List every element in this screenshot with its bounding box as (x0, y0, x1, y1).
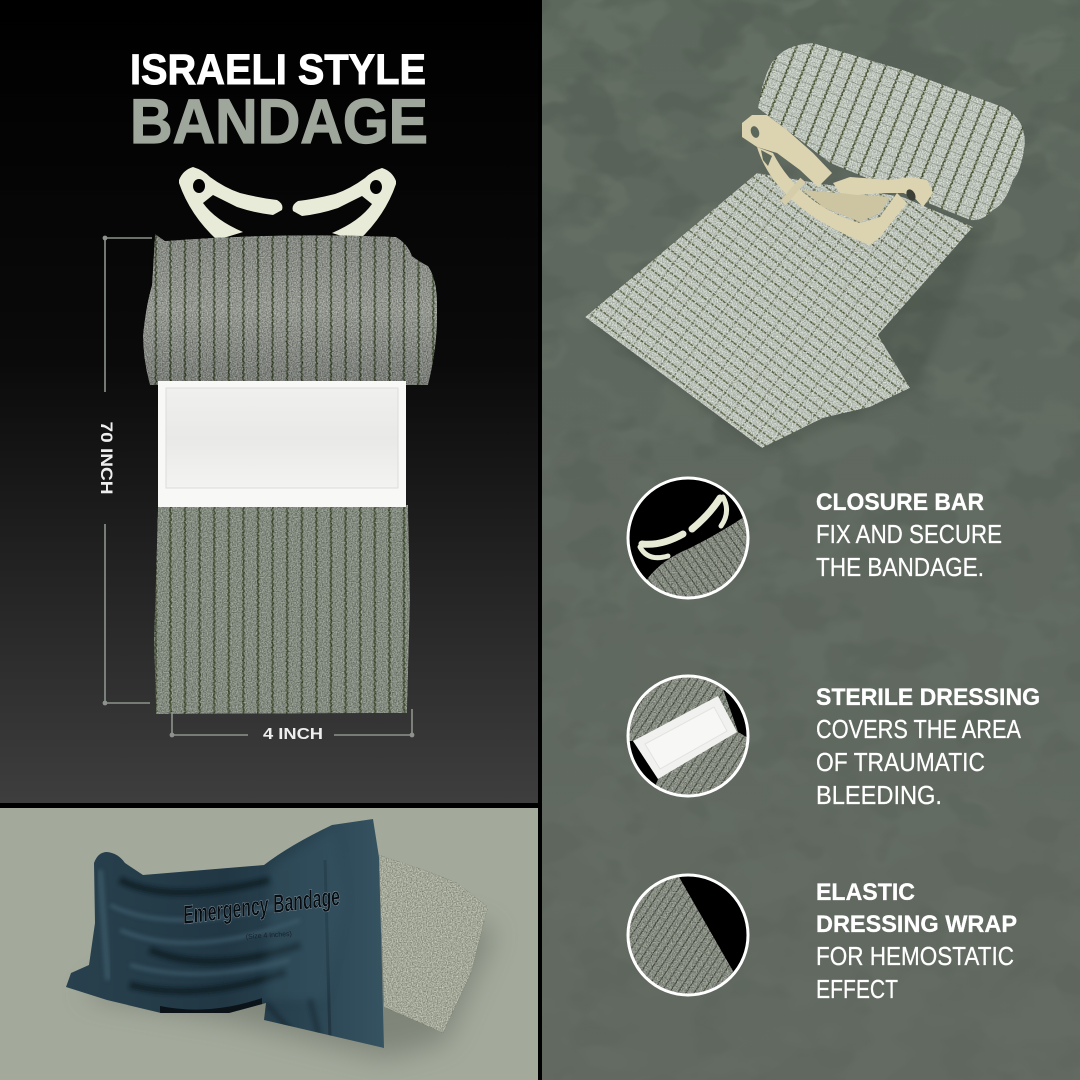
circle icon: elastic wrap detail (626, 874, 750, 996)
feature text: elastic dressing wrap (816, 879, 1017, 1004)
dimension: 4 inch width: 4 INCH (263, 726, 323, 743)
flat unrolled gauze (585, 173, 973, 448)
feature text: sterile dressing (816, 684, 1040, 810)
bandage roll hero image (585, 43, 1025, 452)
bandage: sterile white pad (158, 381, 406, 507)
package label (181, 881, 342, 941)
feature text: sterile dressing: STERILE DRESSING (816, 684, 1040, 711)
gauze emerging from package (379, 855, 488, 1033)
title (130, 46, 428, 157)
panel: packaged bandage (0, 803, 542, 1080)
feature: elastic dressing wrap (626, 874, 1016, 998)
feature: closure bar (626, 476, 1002, 600)
bandage: rolled top (143, 234, 437, 385)
feature text: sterile dressing: BLEEDING. (816, 780, 942, 810)
foil package (66, 819, 384, 1048)
dimension: 4 inch width (170, 709, 414, 743)
feature text: elastic dressing wrap: DRESSING WRAP (816, 911, 1017, 938)
dimension: 70 inch height: 70 INCH (97, 422, 116, 494)
feature text: sterile dressing: COVERS THE AREA (816, 714, 1022, 744)
bandage: lower elastic wrap (154, 505, 410, 714)
feature text: sterile dressing: OF TRAUMATIC (816, 747, 985, 777)
title: BANDAGE (130, 87, 428, 157)
feature text: elastic dressing wrap: ELASTIC (816, 879, 915, 906)
title: ISRAELI STYLE (130, 46, 426, 94)
dimension: 70 inch height (97, 236, 152, 705)
feature text: closure bar: CLOSURE BAR (816, 489, 984, 516)
feature text: closure bar: THE BANDAGE. (816, 552, 984, 582)
circle icon: closure bar detail (626, 476, 750, 600)
panel: dark specification panel (0, 0, 538, 803)
feature text: elastic dressing wrap: FOR HEMOSTATIC (816, 941, 1014, 971)
closure bar, tan (742, 115, 933, 245)
shadow under package (80, 900, 495, 1058)
package label: Emergency Bandage (181, 881, 342, 930)
feature: sterile dressing (620, 670, 1040, 810)
icon: closure bar pieces (179, 167, 396, 241)
feature text: elastic dressing wrap: EFFECT (816, 974, 898, 1004)
rolled gauze (758, 43, 1025, 220)
panel: camouflage feature panel (538, 0, 1080, 1080)
feature text: closure bar: FIX AND SECURE (816, 519, 1002, 549)
package label: (Size 4 Inches) (246, 931, 292, 941)
feature text: closure bar (816, 489, 1002, 582)
circle icon: sterile dressing detail (626, 674, 750, 798)
